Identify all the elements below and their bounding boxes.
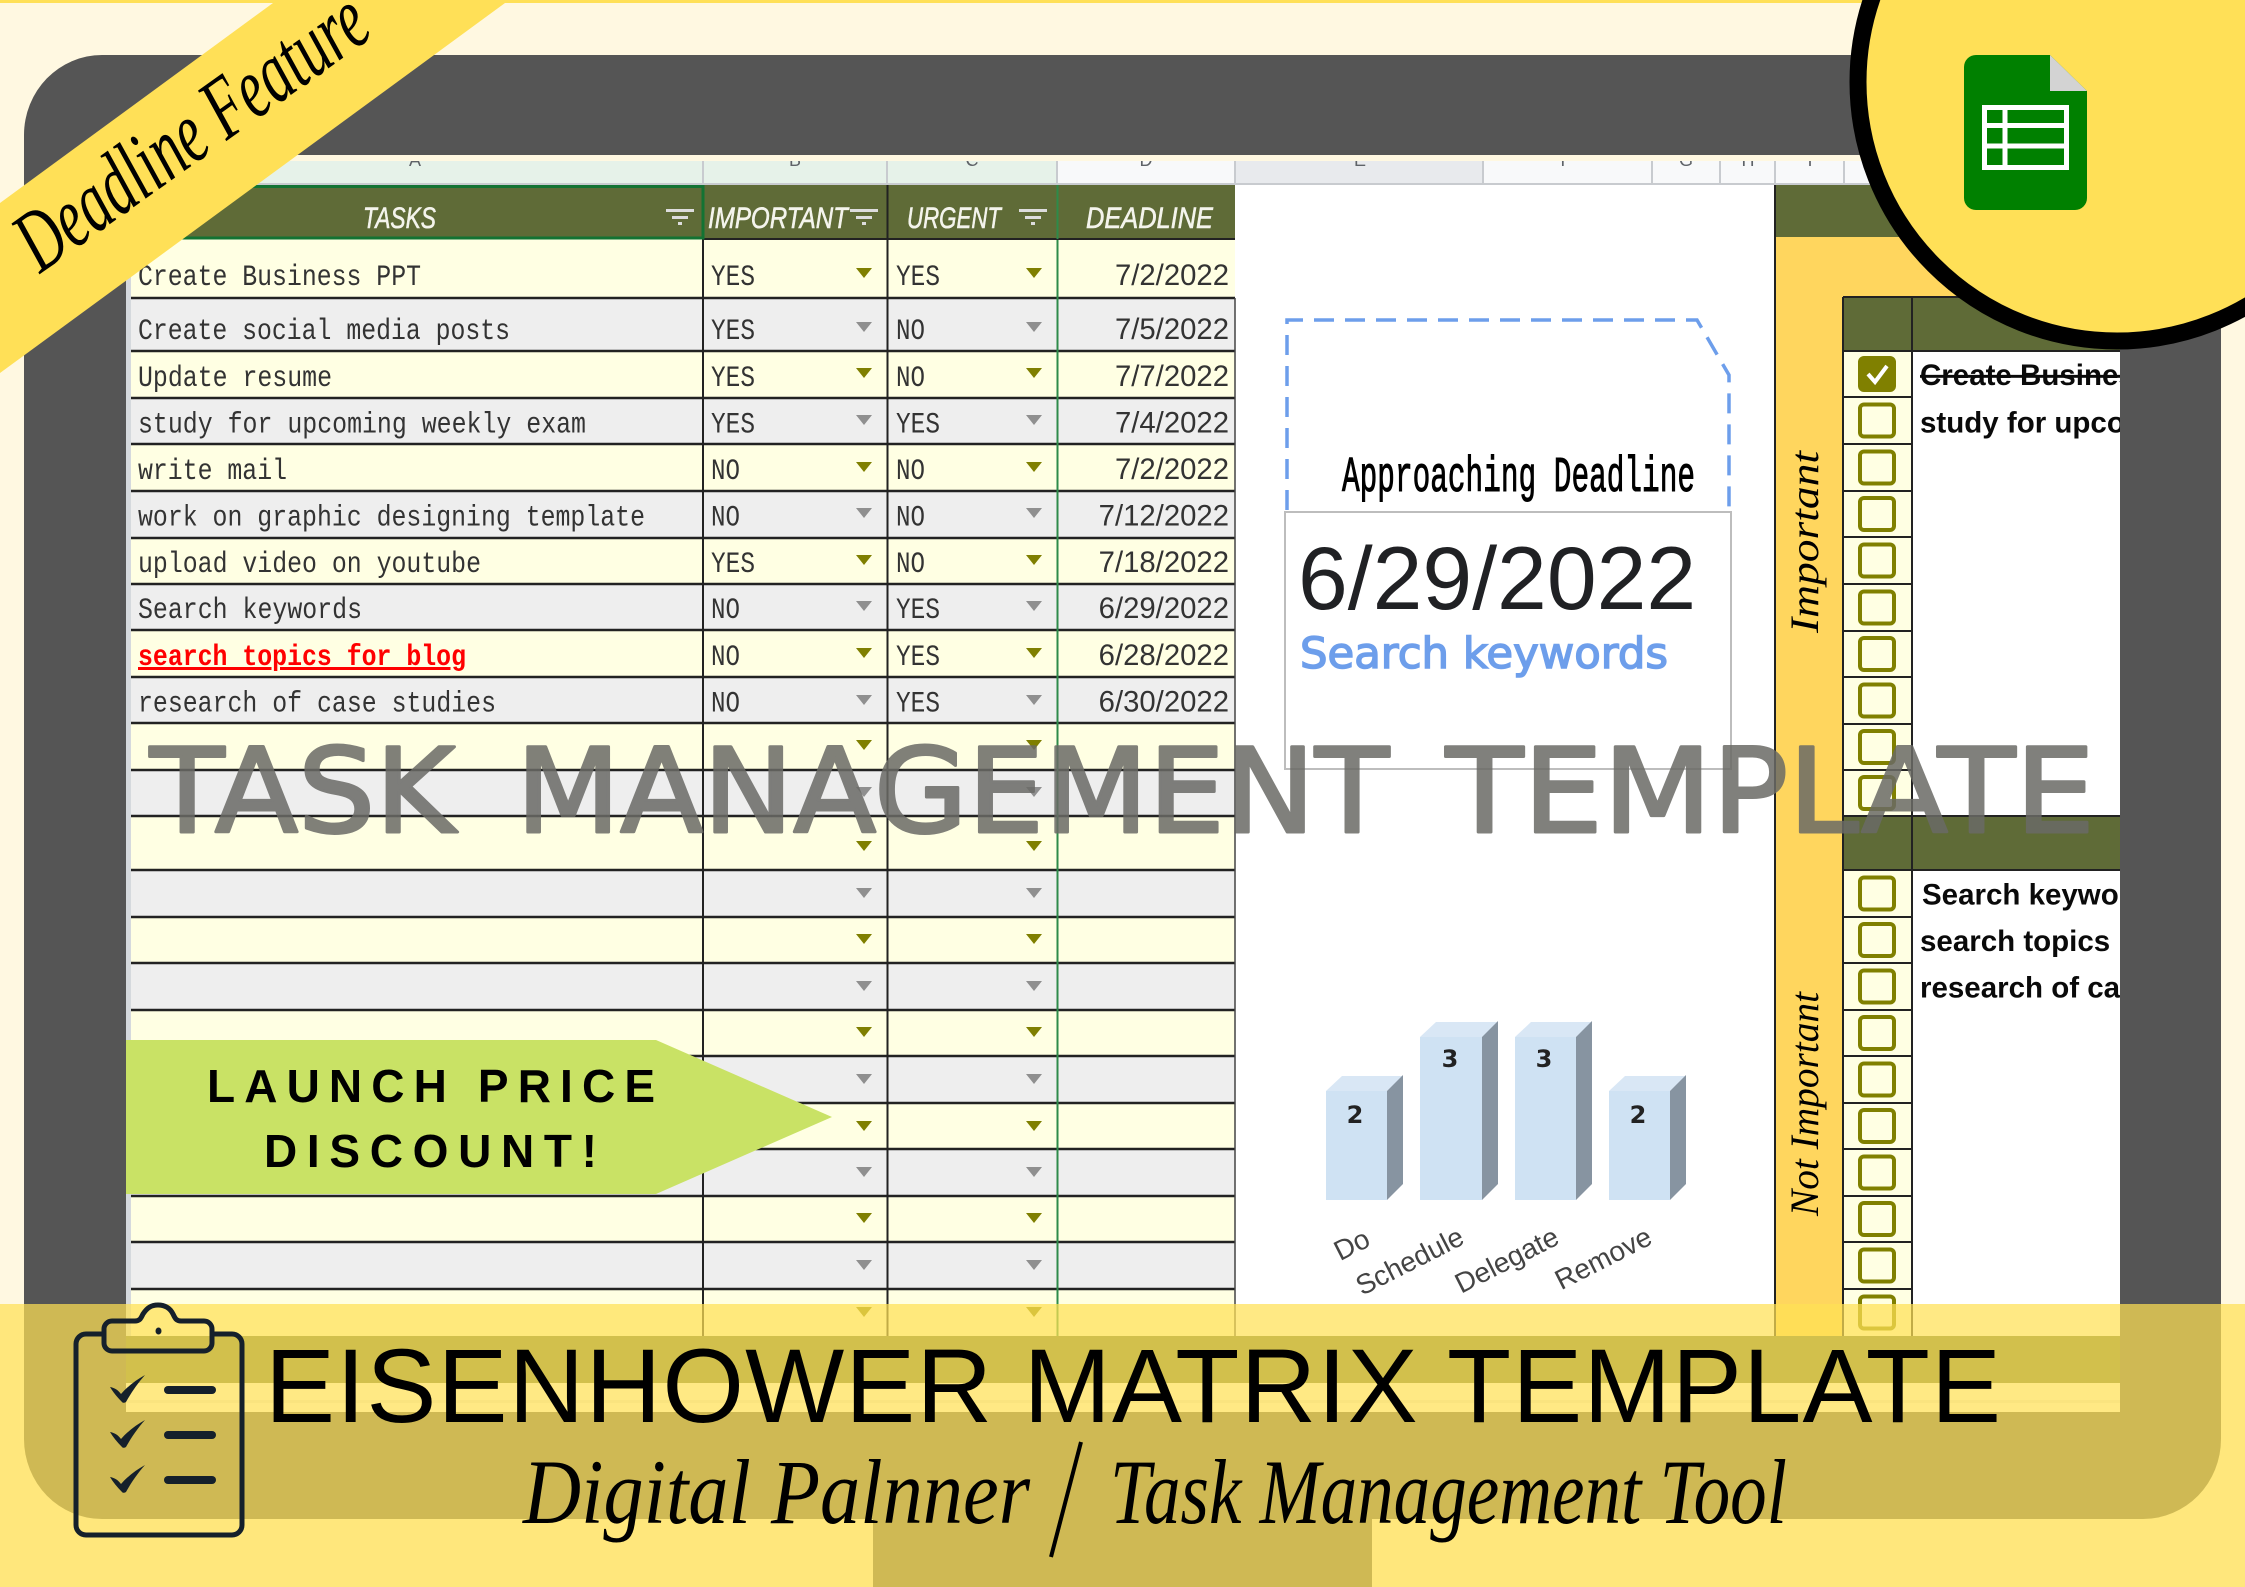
- subtitle: digital planner: [521, 1441, 1787, 1557]
- matrix task labels: [1920, 364, 2120, 998]
- task names: research of case studies: [138, 688, 496, 722]
- overlay title: task management template: [149, 723, 2095, 860]
- table header row: [131, 185, 1235, 239]
- table header row: DEADLINE: [1086, 202, 1214, 235]
- deadline column values: 6/30/2022: [1099, 686, 1229, 718]
- screen footer strip: [126, 1336, 2120, 1412]
- icon: clipboard checklist: [76, 1305, 242, 1535]
- task names: Search keywords: [138, 594, 362, 628]
- urgent column values: NO: [896, 502, 925, 536]
- matrix task labels: Search keywords: [1922, 878, 2165, 912]
- callout: launch price discount: DISCOUNT!: [264, 1125, 597, 1177]
- urgent column values: YES: [896, 261, 940, 295]
- empty boxes: [1860, 404, 1894, 1328]
- column header strip: G: [1679, 150, 1693, 170]
- title: eisenhower matrix template: EISENHOWER MATRIX TEMPLATE: [265, 1328, 2001, 1445]
- column header strip: E: [1354, 150, 1366, 170]
- deadline column values: 6/29/2022: [1099, 592, 1229, 625]
- urgent column values: NO: [896, 548, 925, 582]
- panel: approaching deadline: [1285, 320, 1731, 769]
- column header strip: C: [966, 150, 978, 170]
- bar: schedule: [1420, 1021, 1498, 1200]
- chart axis labels: Schedule: [1351, 1221, 1469, 1301]
- column header strip: H: [1742, 150, 1754, 170]
- subtitle: digital planner: Digital Palnner: [521, 1441, 1031, 1543]
- chart axis labels: Delegate: [1450, 1221, 1564, 1299]
- matrix side band: [1775, 185, 2120, 1336]
- overlay title: task management template: MANAGEMENT: [516, 723, 1390, 860]
- chart axis labels: Remove: [1550, 1221, 1657, 1296]
- important column values: [711, 261, 755, 722]
- checked box: [1860, 358, 1894, 390]
- label: important: Important: [1782, 450, 1827, 634]
- bar: delegate: [1515, 1021, 1592, 1200]
- important column values: YES: [711, 408, 755, 442]
- deadline column values: 7/18/2022: [1099, 546, 1229, 579]
- deadline column values: 7/4/2022: [1115, 406, 1229, 440]
- chart axis labels: Do: [1329, 1223, 1375, 1267]
- task names: Create Business PPT: [138, 261, 421, 295]
- deadline card: Search keywords: [1300, 629, 1668, 679]
- task names: search topics for blog: [138, 641, 466, 675]
- dashed tab shape: [1287, 320, 1729, 510]
- task names: upload video on youtube: [138, 548, 481, 582]
- table row backgrounds: [131, 239, 1235, 1336]
- urgent column values: YES: [896, 594, 940, 628]
- table header row: TASKS: [363, 202, 436, 235]
- deadline column values: 6/28/2022: [1099, 639, 1229, 672]
- callout: launch price discount: [126, 1040, 832, 1194]
- urgent column values: NO: [896, 315, 925, 349]
- task names: Create social media posts: [138, 315, 510, 349]
- bar: schedule: 3: [1442, 1045, 1458, 1073]
- matrix task labels: Create Business PPT: [1920, 359, 2217, 392]
- column header strip: D: [1140, 150, 1152, 170]
- checkbox column: [1843, 297, 2120, 1336]
- urgent column values: YES: [896, 688, 940, 722]
- urgent column values: NO: [896, 362, 925, 396]
- deadline column values: 7/12/2022: [1099, 500, 1229, 532]
- matrix task labels: search topics: [1920, 925, 2110, 958]
- deadline card: [1285, 512, 1731, 769]
- important column values: YES: [711, 362, 755, 396]
- overlay title: task management template: TASK: [149, 723, 458, 860]
- panel: task table: [131, 185, 1235, 1336]
- bar: remove: 2: [1630, 1101, 1646, 1129]
- subtitle: digital planner: Task Management Tool: [1110, 1441, 1787, 1543]
- bar chart: [1326, 1021, 1686, 1301]
- urgent column values: [896, 261, 940, 722]
- deadline column values: [1099, 259, 1229, 718]
- deadline column values: 7/5/2022: [1115, 313, 1229, 346]
- footer band: [0, 1304, 2245, 1587]
- column header strip: A: [409, 150, 421, 170]
- column header strip: [256, 161, 1870, 185]
- deadline column values: 7/2/2022: [1115, 259, 1229, 292]
- important column values: NO: [711, 688, 740, 722]
- task names: study for upcoming weekly exam: [138, 408, 586, 442]
- important column values: NO: [711, 455, 740, 489]
- bar: delegate: 3: [1536, 1045, 1552, 1073]
- icon: dropdown arrows on gray rows: [856, 322, 1042, 1270]
- badge: google sheets: [1858, 0, 2245, 341]
- overlay title: task management template: TEMPLATE: [1445, 723, 2095, 860]
- task names: work on graphic designing template: [138, 502, 645, 536]
- urgent column values: NO: [896, 455, 925, 489]
- task names: Update resume: [138, 362, 332, 396]
- heading: approaching deadline: Approaching Deadline: [1342, 450, 1695, 507]
- chart axis labels: [1329, 1221, 1657, 1301]
- deadline column values: 7/2/2022: [1115, 453, 1229, 486]
- icon: filter buttons: [666, 209, 1047, 225]
- important column values: YES: [711, 315, 755, 349]
- bar: remove: [1609, 1075, 1686, 1200]
- icon: sheets file: [1964, 55, 2087, 210]
- task names: write mail: [138, 455, 287, 489]
- important column values: YES: [711, 261, 755, 295]
- important column values: YES: [711, 548, 755, 582]
- column header strip: F: [1560, 150, 1572, 170]
- important column values: NO: [711, 641, 740, 675]
- table header row: IMPORTANT: [708, 202, 850, 235]
- urgent column values: YES: [896, 641, 940, 675]
- matrix top bar: [1776, 185, 2120, 237]
- deadline card: 6/29/2022: [1298, 528, 1696, 628]
- urgent column values: YES: [896, 408, 940, 442]
- column header strip: B: [789, 150, 801, 170]
- panel: spreadsheet screen: [126, 150, 2123, 1412]
- task names: [138, 261, 645, 722]
- important column values: NO: [711, 502, 740, 536]
- panel: eisenhower matrix: [1774, 185, 2120, 1336]
- column header strip: I: [1807, 150, 1813, 170]
- important column values: NO: [711, 594, 740, 628]
- bar: do: [1326, 1075, 1403, 1200]
- callout: launch price discount: LAUNCH PRICE: [207, 1060, 655, 1112]
- label: not important: Not Important: [1782, 991, 1827, 1217]
- table header row: URGENT: [907, 202, 1003, 235]
- bar: do: 2: [1347, 1101, 1363, 1129]
- deadline column values: 7/7/2022: [1115, 360, 1229, 393]
- icon: dropdown arrows on yellow rows: [856, 268, 1042, 1317]
